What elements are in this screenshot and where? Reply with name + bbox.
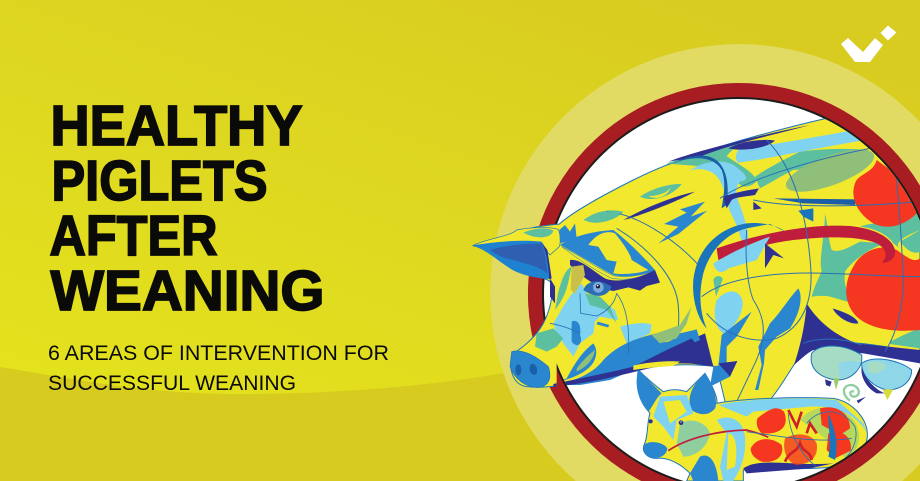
brow shadow	[570, 260, 660, 291]
title: HEALTHY	[50, 94, 302, 157]
logo: white check mark with diamond	[841, 26, 896, 62]
belly	[794, 303, 920, 365]
title: WEANING	[50, 259, 324, 322]
upper back green and blue marks	[584, 210, 623, 223]
green branching veins	[812, 214, 880, 302]
shoulder light-blue strip	[690, 162, 748, 240]
subtitle: SUCCESSFUL WEANING	[48, 372, 296, 395]
cheek and snout colour masses	[553, 283, 618, 357]
anatomical contour lines	[702, 140, 920, 402]
piglet organs	[751, 407, 851, 465]
snout	[510, 351, 550, 387]
shoulder contour lines	[606, 211, 700, 326]
ear	[473, 227, 560, 255]
piglet gut tube	[668, 430, 768, 451]
mid back dark flecks	[773, 198, 857, 205]
subtitle: 6 AREAS OF INTERVENTION FOR	[48, 342, 389, 365]
eye	[583, 281, 612, 296]
circular medallion	[490, 44, 920, 481]
forehead patch	[560, 230, 655, 276]
head top marks	[559, 223, 577, 243]
sow head	[473, 211, 713, 387]
crimson vessel	[717, 226, 895, 263]
jaw and underside shadow	[633, 338, 713, 367]
title: AFTER	[50, 204, 218, 267]
blue fin on leg	[755, 288, 801, 390]
piglet body	[637, 370, 867, 481]
piglet contours	[747, 412, 856, 467]
title	[50, 94, 324, 322]
neck blue mass	[557, 329, 700, 385]
upper back colour bands	[667, 140, 757, 187]
udders	[811, 346, 862, 380]
piglet tail	[844, 385, 859, 401]
hearts	[853, 160, 920, 227]
face contours	[550, 293, 629, 353]
illustration: sow and piglet	[473, 119, 920, 481]
piglet torso markings	[718, 398, 867, 433]
piglet face patches	[653, 395, 693, 440]
piglet ears	[637, 370, 662, 412]
sow body	[473, 119, 920, 408]
title: PIGLETS	[52, 149, 268, 212]
piglet	[637, 370, 867, 481]
subtitle	[48, 342, 389, 395]
hindquarters and hearts	[690, 140, 920, 402]
thick blue shoulder arc	[693, 223, 785, 328]
